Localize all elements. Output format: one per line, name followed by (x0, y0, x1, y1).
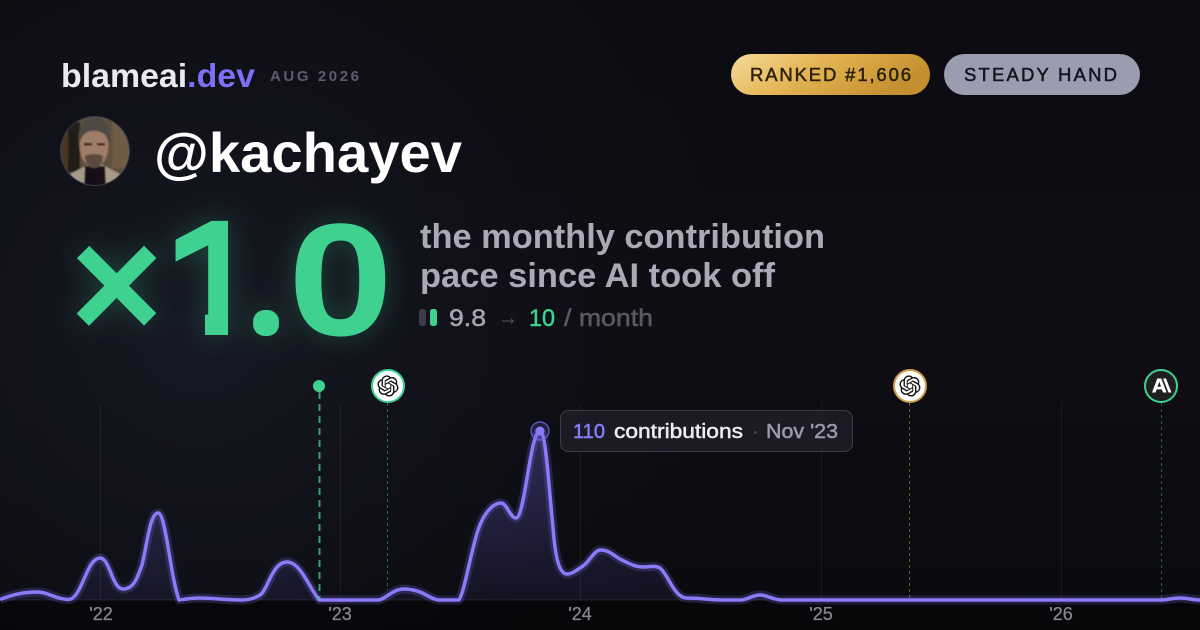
marker: OpenAI model gold (894, 370, 926, 598)
pace before and after: 10 (529, 305, 555, 332)
timeline chart (0, 403, 1200, 600)
pace before and after: → (498, 304, 518, 331)
year labels (89, 604, 1073, 624)
multiplier glow: 0 (288, 190, 393, 369)
description (420, 218, 825, 295)
tooltip: contributions (614, 421, 743, 443)
badge: rank: RANKED #1,606 (750, 64, 911, 85)
multiplier value: 1 (164, 188, 274, 367)
year labels: '22 (89, 604, 113, 624)
year labels: '25 (809, 604, 833, 624)
badge: steady hand: STEADY HAND (964, 64, 1117, 85)
multiplier value: 0 (288, 190, 393, 369)
multiplier value: × (70, 194, 163, 373)
multiplier glow: × (70, 194, 163, 373)
multiplier value: . (263, 307, 269, 329)
year labels: '24 (568, 604, 592, 624)
marker: Anthropic model (1145, 370, 1177, 598)
avatar (60, 116, 130, 186)
multiplier glow (74, 212, 398, 348)
contributions line (0, 431, 1200, 600)
pace before and after (419, 304, 653, 332)
description: pace since AI took off (420, 257, 776, 295)
pace before and after: / month (564, 305, 653, 332)
marker: AI take-off (313, 380, 325, 600)
peak marker (531, 422, 549, 440)
year labels: '23 (328, 604, 352, 624)
multiplier glow: . (263, 307, 269, 329)
area fill (0, 431, 1200, 600)
tooltip: 110 (573, 421, 605, 443)
tooltip: · (752, 421, 759, 443)
badge: steady hand (944, 54, 1140, 95)
badge: rank (731, 54, 930, 95)
multiplier glow: 1 (164, 188, 274, 367)
username heading: @kachayev (154, 121, 462, 184)
date label: AUG 2026 (270, 68, 359, 85)
multiplier value (76, 220, 386, 337)
tooltip: Nov '23 (766, 421, 838, 443)
line halo (0, 431, 1200, 600)
year labels: '26 (1049, 604, 1073, 624)
marker: OpenAI model green (372, 370, 404, 590)
tooltip (560, 410, 852, 452)
pace before and after: 9.8 (449, 305, 486, 332)
brand logo: blameai.dev (61, 57, 256, 94)
description: the monthly contribution (420, 218, 825, 256)
